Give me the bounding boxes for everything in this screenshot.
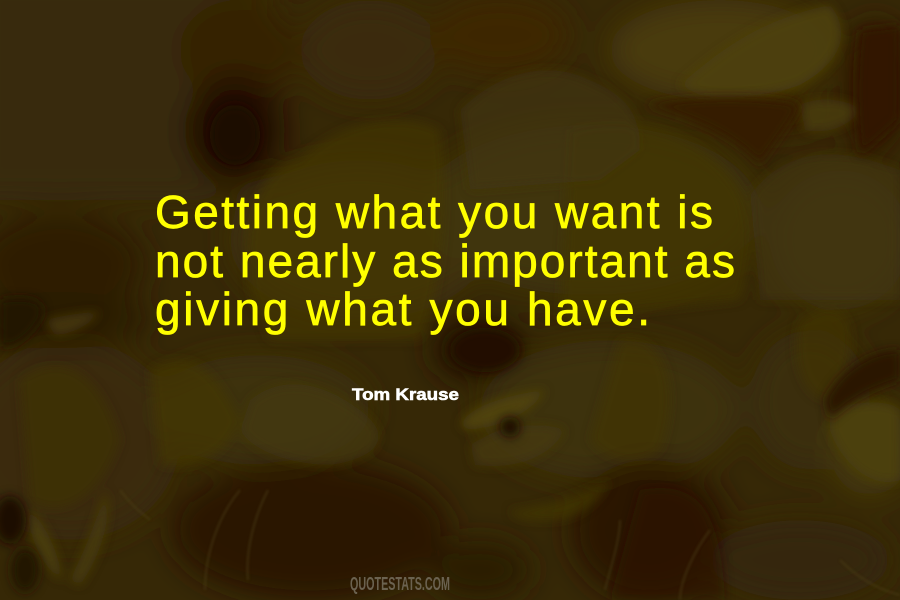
quote text [155, 186, 735, 335]
thin highlight strokes on petals [120, 490, 900, 600]
watermark: QUOTESTATS.COM [350, 574, 450, 594]
quote text: giving what you have. [155, 283, 650, 335]
author name: Tom Krause [352, 385, 459, 404]
quote text: Getting what you want is [155, 186, 713, 238]
quote text: not nearly as important as [155, 235, 735, 287]
